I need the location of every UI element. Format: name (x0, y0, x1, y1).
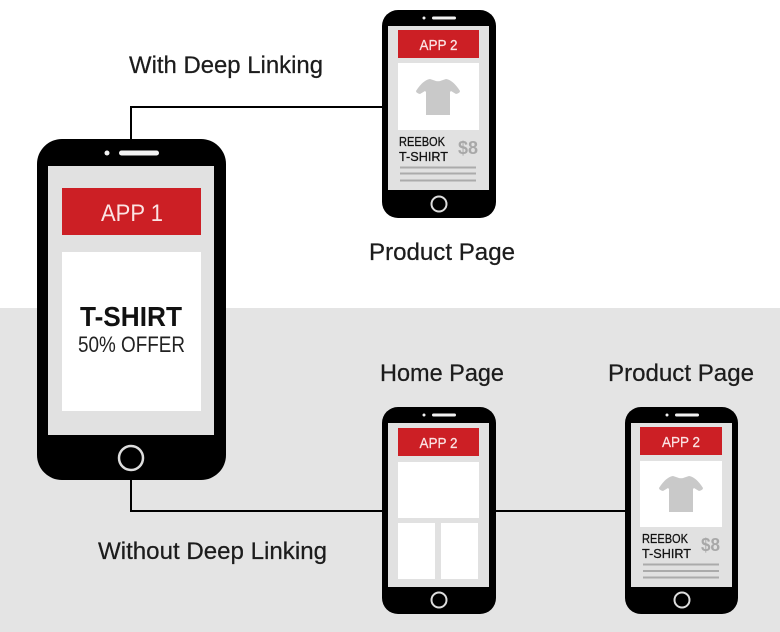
phone: App 1 (37, 139, 226, 480)
phone: Home Page: APP 2 (420, 435, 458, 452)
price: $8 (458, 138, 478, 158)
label: Home Page: Home Page (380, 360, 504, 387)
background band (0, 308, 780, 632)
phone: Product Page without deep linking (625, 407, 738, 614)
icon: t-shirt (416, 79, 460, 115)
phone: Product Page with deep linking (382, 10, 496, 218)
App 1 title: APP 1 (101, 200, 163, 227)
label: Product Page top: Product Page (369, 239, 515, 266)
product name: REEBOK (399, 134, 445, 149)
label: Without Deep Linking: Without Deep Linking (98, 538, 327, 565)
connector: without deep linking (131, 479, 626, 511)
phone: Product Page without deep linking: T-SHIRT (642, 546, 691, 561)
price: $8 (701, 535, 720, 555)
icon: t-shirt (659, 476, 703, 512)
phone: Product Page with deep linking: T-SHIRT (399, 149, 448, 164)
phone: Product Page without deep linking: APP 2 (662, 434, 700, 451)
label: Product Page bottom: Product Page (608, 360, 754, 387)
label: With Deep Linking: With Deep Linking (129, 52, 323, 79)
phone: Product Page with deep linking: APP 2 (420, 37, 458, 54)
phone: Home Page (382, 407, 496, 614)
product name: REEBOK (642, 531, 688, 546)
offer heading: T-SHIRT (80, 301, 182, 332)
offer text: 50% OFFER (78, 332, 185, 357)
connector: with deep linking (131, 107, 383, 140)
